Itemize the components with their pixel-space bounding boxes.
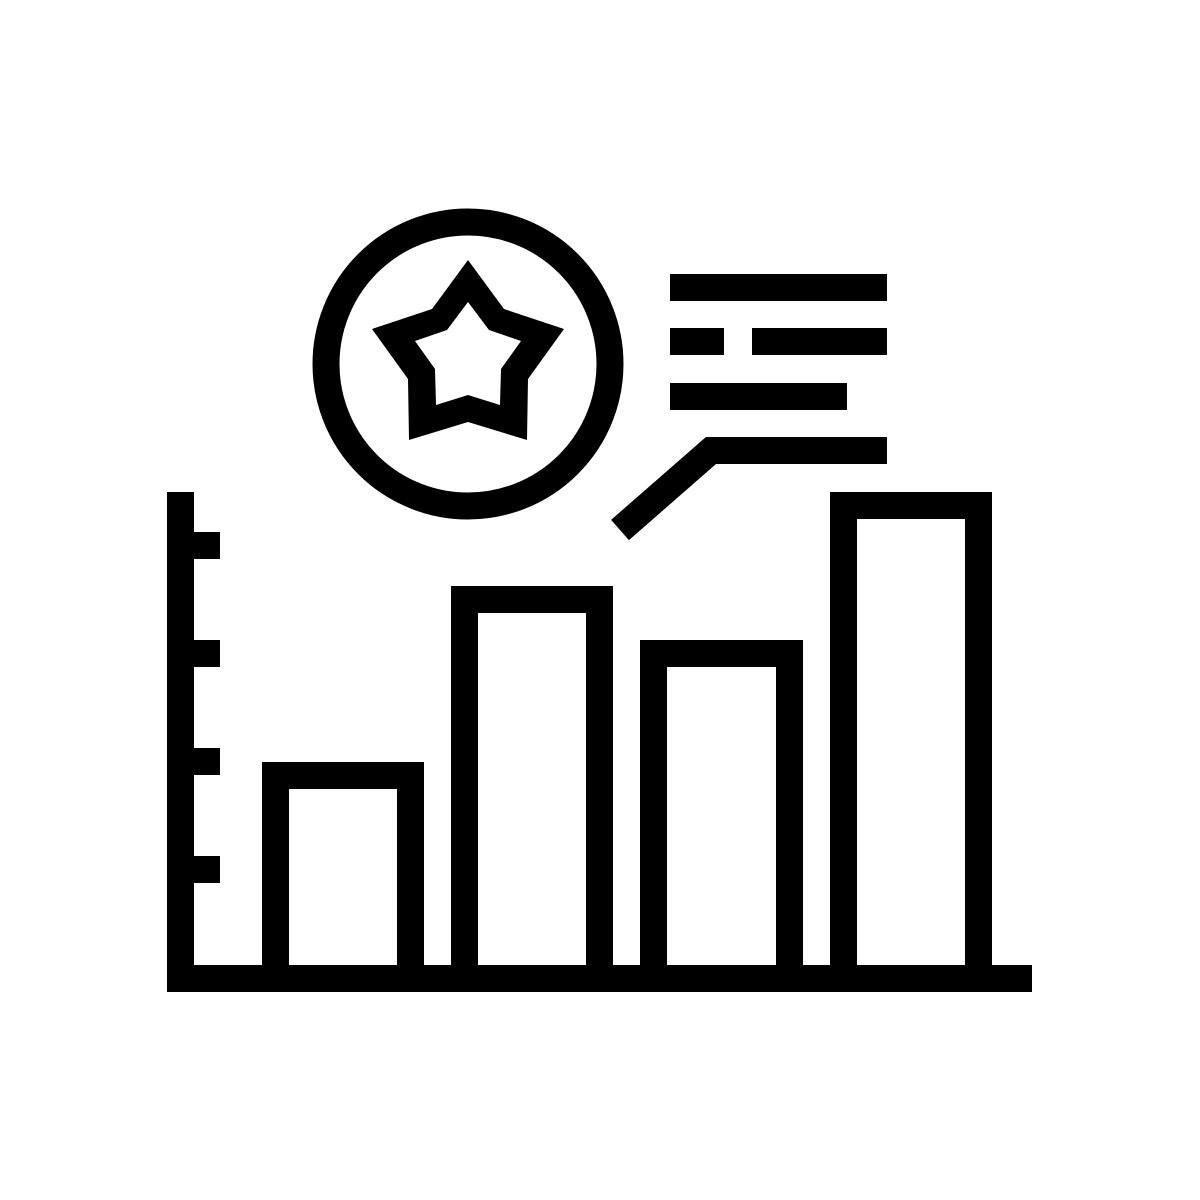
bars <box>276 506 978 978</box>
star badge <box>326 222 610 506</box>
callout text lines <box>620 274 887 530</box>
axes <box>167 492 1032 992</box>
